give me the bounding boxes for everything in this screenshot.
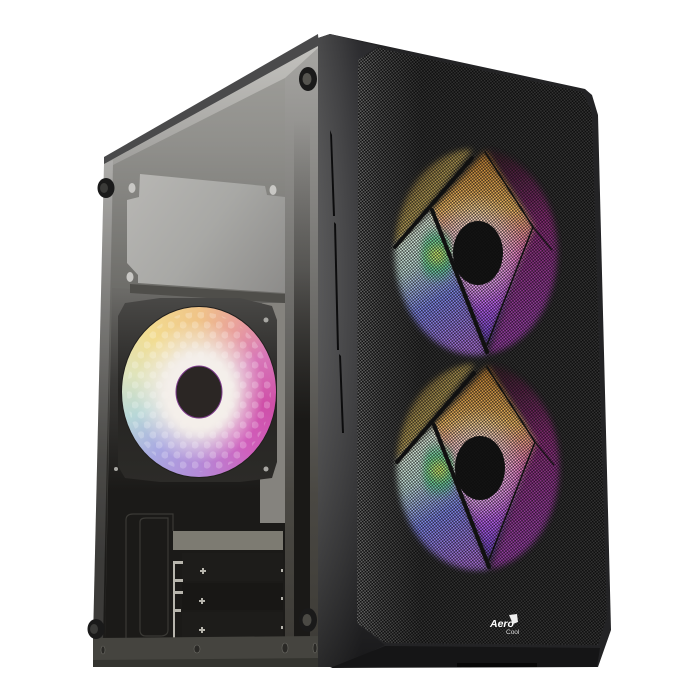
- rgb ring: [122, 307, 276, 477]
- top edge strip: [104, 34, 319, 166]
- top fan: [385, 140, 570, 365]
- plate holes: [126, 183, 276, 282]
- mesh overlay: [357, 48, 607, 645]
- drive cover plate: [127, 174, 285, 293]
- right side column: [285, 48, 318, 640]
- left glass edge highlight: [93, 160, 113, 640]
- white ring: [163, 353, 235, 433]
- side pillar: [318, 34, 385, 667]
- inner back wall shade: [105, 78, 285, 640]
- mesh base: [357, 48, 607, 645]
- expansion slots: [173, 553, 283, 639]
- case body: [93, 34, 611, 667]
- rear bracket: [126, 514, 173, 640]
- bottom fan: [387, 355, 572, 580]
- plate screws: [101, 643, 317, 654]
- frame ring: [121, 306, 277, 478]
- dark column: [294, 120, 310, 640]
- frame mount holes: [114, 318, 268, 472]
- base strip: [93, 658, 320, 667]
- screw bottom left: [88, 619, 104, 639]
- grey expansion strip: [173, 531, 283, 550]
- top fan glow through mesh: [385, 140, 570, 365]
- chassis band under plate: [130, 284, 285, 303]
- hub: [176, 366, 222, 418]
- outer shell: [318, 34, 611, 667]
- bottom plate: [93, 636, 319, 660]
- screw bottom right: [299, 608, 317, 632]
- rear fan: [114, 298, 277, 482]
- screws: [88, 67, 317, 639]
- honeycomb dots: [127, 312, 271, 472]
- logo: Aero: [489, 618, 515, 630]
- front panel: [330, 48, 607, 668]
- vent slots: [330, 130, 344, 433]
- logo icon: [509, 614, 518, 624]
- light window strip: [260, 303, 285, 523]
- screw top left: [98, 178, 114, 198]
- bottom notch: [457, 663, 537, 667]
- logo: Cool: [506, 629, 520, 636]
- front lower lip: [330, 646, 600, 668]
- bottom fan glow through mesh: [387, 355, 572, 580]
- screw top right: [299, 67, 317, 91]
- glass side panel: [93, 46, 318, 640]
- fan frame: [118, 298, 277, 482]
- logo: [489, 614, 520, 636]
- lower chassis: [105, 288, 285, 640]
